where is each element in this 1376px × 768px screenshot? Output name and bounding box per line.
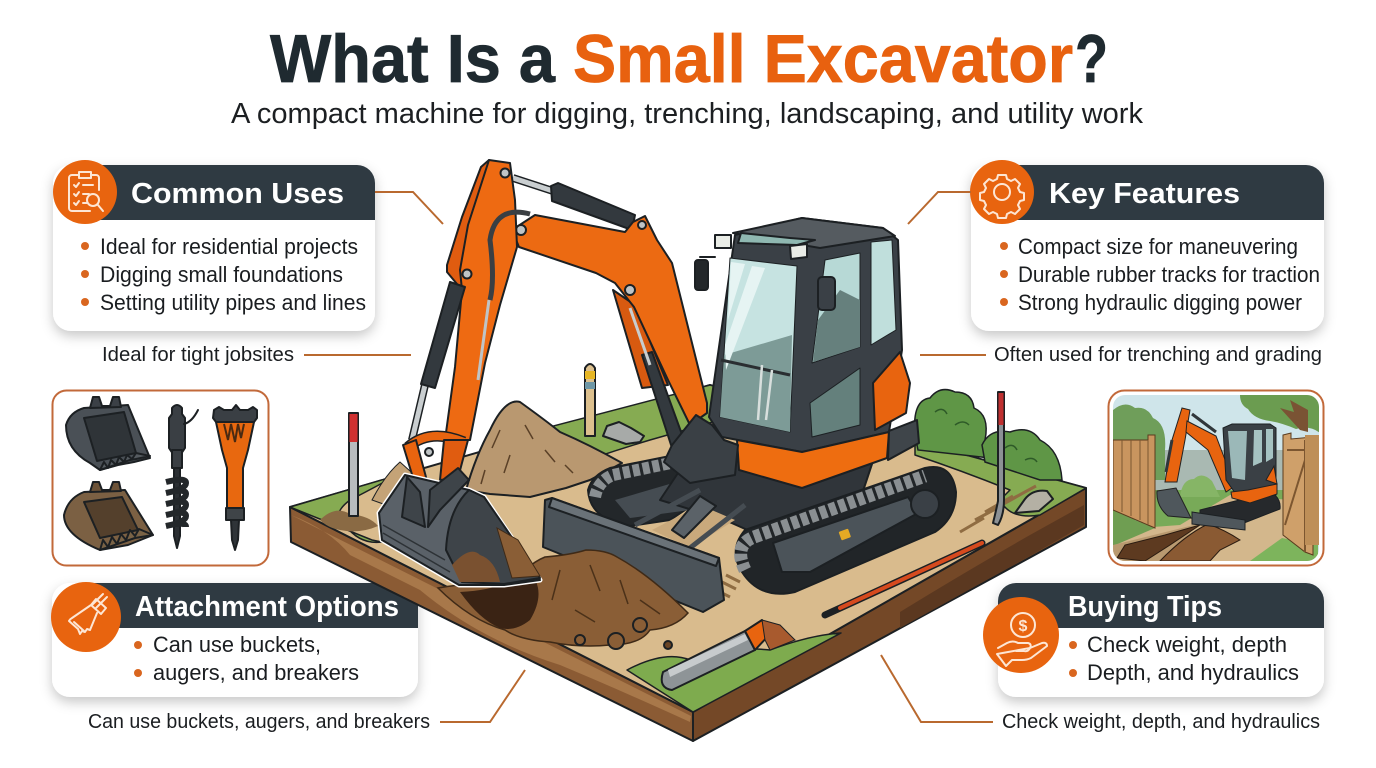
icon: clipboard with magnifier — [53, 160, 117, 224]
boom — [512, 215, 707, 448]
title: What Is a — [270, 21, 556, 97]
survey post — [585, 364, 595, 436]
steel pipe — [662, 620, 795, 690]
front track — [736, 467, 956, 594]
icon: hand with coin: $ — [1019, 618, 1028, 635]
arrow: trenching connector — [920, 354, 986, 356]
arm cylinder — [412, 282, 465, 440]
panel: jobsite photo illustration — [1108, 390, 1324, 566]
subtitle: A compact machine for digging, trenching, landscaping, and utility work — [231, 98, 1144, 130]
arrow: key features connector — [908, 192, 971, 224]
panel: common uses: Common Uses — [131, 178, 344, 210]
arrow: buying tips connector — [881, 655, 993, 722]
arrow: common uses connector — [375, 192, 443, 224]
arrow: tight jobsites connector — [304, 354, 411, 356]
swing mount — [664, 415, 738, 483]
right rock — [1015, 491, 1053, 513]
title: ? — [1075, 21, 1108, 97]
bullet list: common uses: Setting utility pipes and lines — [100, 290, 366, 315]
dirt pile — [466, 402, 622, 497]
caption: trenching and grading: Often used for trenching and grading — [994, 344, 1322, 366]
bullet list: buying tips — [1069, 632, 1299, 685]
bullet list: attachments: Can use buckets, — [153, 632, 321, 657]
boom cylinder — [513, 178, 635, 230]
panel: key features: Key Features — [1049, 178, 1240, 210]
excavated hole and soil — [438, 550, 688, 649]
bullet list: common uses — [81, 234, 366, 315]
cab — [695, 218, 919, 488]
dozer blade — [543, 498, 724, 612]
caption: attachments: Can use buckets, augers, and breakers — [88, 711, 430, 733]
icon: auger — [166, 405, 198, 548]
panel: common uses — [53, 160, 375, 331]
rock — [603, 422, 644, 444]
arrow: attachments connector — [440, 670, 525, 722]
panel: key features — [970, 160, 1324, 331]
icon: dark bucket — [66, 397, 150, 470]
cab glass — [720, 240, 896, 437]
panel: buying tips — [983, 583, 1324, 697]
panel: attachment images — [52, 390, 268, 566]
icon: hydraulic breaker — [213, 405, 257, 550]
right marker pole — [993, 392, 1004, 525]
bucket — [379, 468, 540, 585]
caption: tight jobsites: Ideal for tight jobsites — [102, 344, 294, 366]
icon: brush — [51, 582, 121, 652]
title: Small Excavator — [573, 21, 1073, 97]
icon: rusty bucket — [64, 482, 153, 550]
left marker pole — [349, 413, 358, 516]
arm — [445, 160, 530, 440]
ground block — [290, 385, 1086, 741]
bullet list: attachments — [134, 632, 359, 685]
title — [270, 21, 1108, 97]
bullet list: buying tips: Check weight, depth — [1087, 632, 1287, 657]
bullet list: key features: Compact size for maneuvering — [1018, 234, 1298, 259]
red rod — [825, 543, 982, 615]
bullet list: common uses: Digging small foundations — [100, 262, 343, 287]
bullet list: key features: Durable rubber tracks for traction — [1018, 262, 1320, 287]
central illustration: excavator on ground — [290, 160, 1086, 741]
bullet list: key features — [1000, 234, 1320, 315]
bucket link — [403, 436, 468, 494]
bushes — [915, 390, 1062, 480]
bullet list: buying tips: Depth, and hydraulics — [1087, 660, 1299, 685]
bullet list: common uses: Ideal for residential projects — [100, 234, 358, 259]
caption: buying tips: Check weight, depth, and hydraulics — [1002, 711, 1320, 733]
undercarriage — [635, 440, 880, 548]
rear track — [588, 450, 730, 526]
cab orange panels — [737, 352, 919, 488]
icon: gear — [970, 160, 1034, 224]
bullet list: key features: Strong hydraulic digging power — [1018, 290, 1302, 315]
panel: attachment options: Attachment Options — [135, 591, 399, 623]
panel: attachment options — [51, 582, 418, 697]
cab lights and mirrors — [695, 235, 835, 310]
panel: buying tips: Buying Tips — [1068, 591, 1222, 623]
bullet list: attachments: augers, and breakers — [153, 660, 359, 685]
icon: hand with coin — [983, 597, 1059, 673]
